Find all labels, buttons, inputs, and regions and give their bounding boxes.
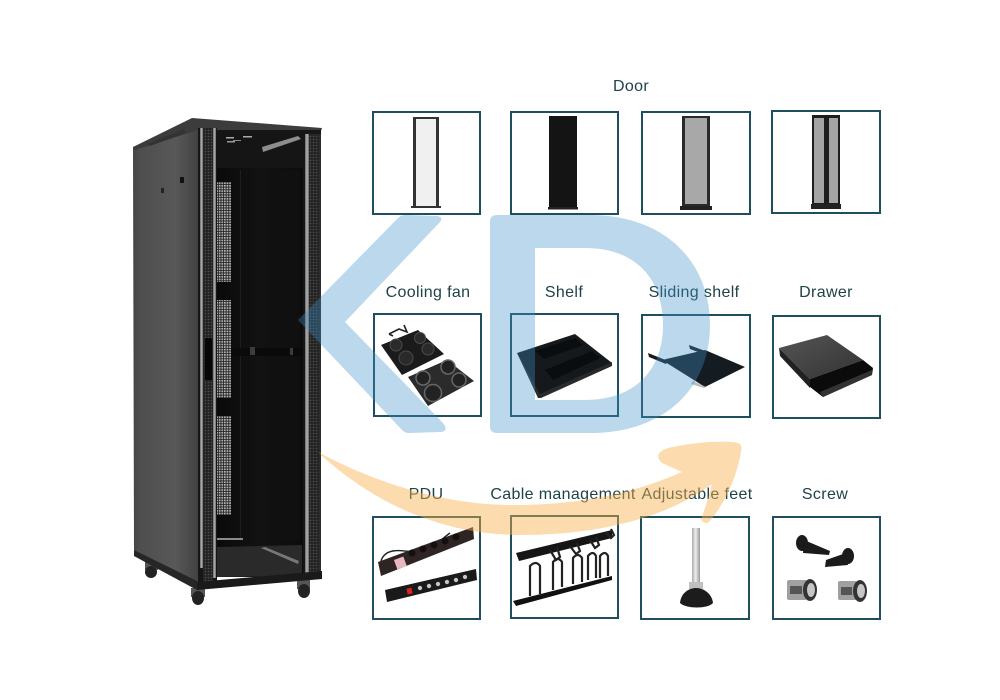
- door option 3: [642, 112, 750, 214]
- cable management panel: [511, 516, 618, 618]
- heading: Cooling fan: Cooling fan: [386, 284, 470, 301]
- mid bracket: [231, 348, 303, 356]
- perforated rear panels: [217, 182, 231, 282]
- heading: PDU: PDU: [409, 486, 443, 503]
- heading: Screw: Screw: [802, 486, 848, 503]
- heading: Cable management: Cable management: [490, 486, 636, 503]
- cabinet illustration: [133, 118, 322, 605]
- PDU panel: [373, 517, 480, 619]
- caster wheels: [145, 560, 310, 605]
- door option 2: [511, 112, 618, 214]
- screw panel: [773, 517, 880, 619]
- door option 4: [772, 111, 880, 213]
- heading: Drawer: Drawer: [799, 284, 853, 301]
- heading: Sliding shelf: Sliding shelf: [649, 284, 740, 301]
- cabinet floor: [217, 545, 302, 577]
- adjustable feet panel: [641, 517, 749, 619]
- watermark: letter D: [490, 215, 710, 433]
- watermark: orange swoosh arrow: [318, 442, 742, 535]
- left door post: [198, 128, 217, 584]
- sliding shelf panel: [642, 315, 750, 417]
- interior: [216, 130, 304, 577]
- watermark: letter K: [298, 215, 446, 433]
- side panel: [133, 128, 198, 588]
- heading: Door: Door: [613, 78, 649, 95]
- heading: Adjustable feet: Adjustable feet: [641, 486, 753, 503]
- door option 1: [373, 112, 480, 214]
- cooling fan panel: [374, 314, 481, 416]
- cabinet base: [197, 571, 322, 590]
- shelf panel: [511, 314, 618, 416]
- right door post: [303, 130, 321, 579]
- heading: Shelf: Shelf: [545, 284, 583, 301]
- drawer panel: [773, 316, 880, 418]
